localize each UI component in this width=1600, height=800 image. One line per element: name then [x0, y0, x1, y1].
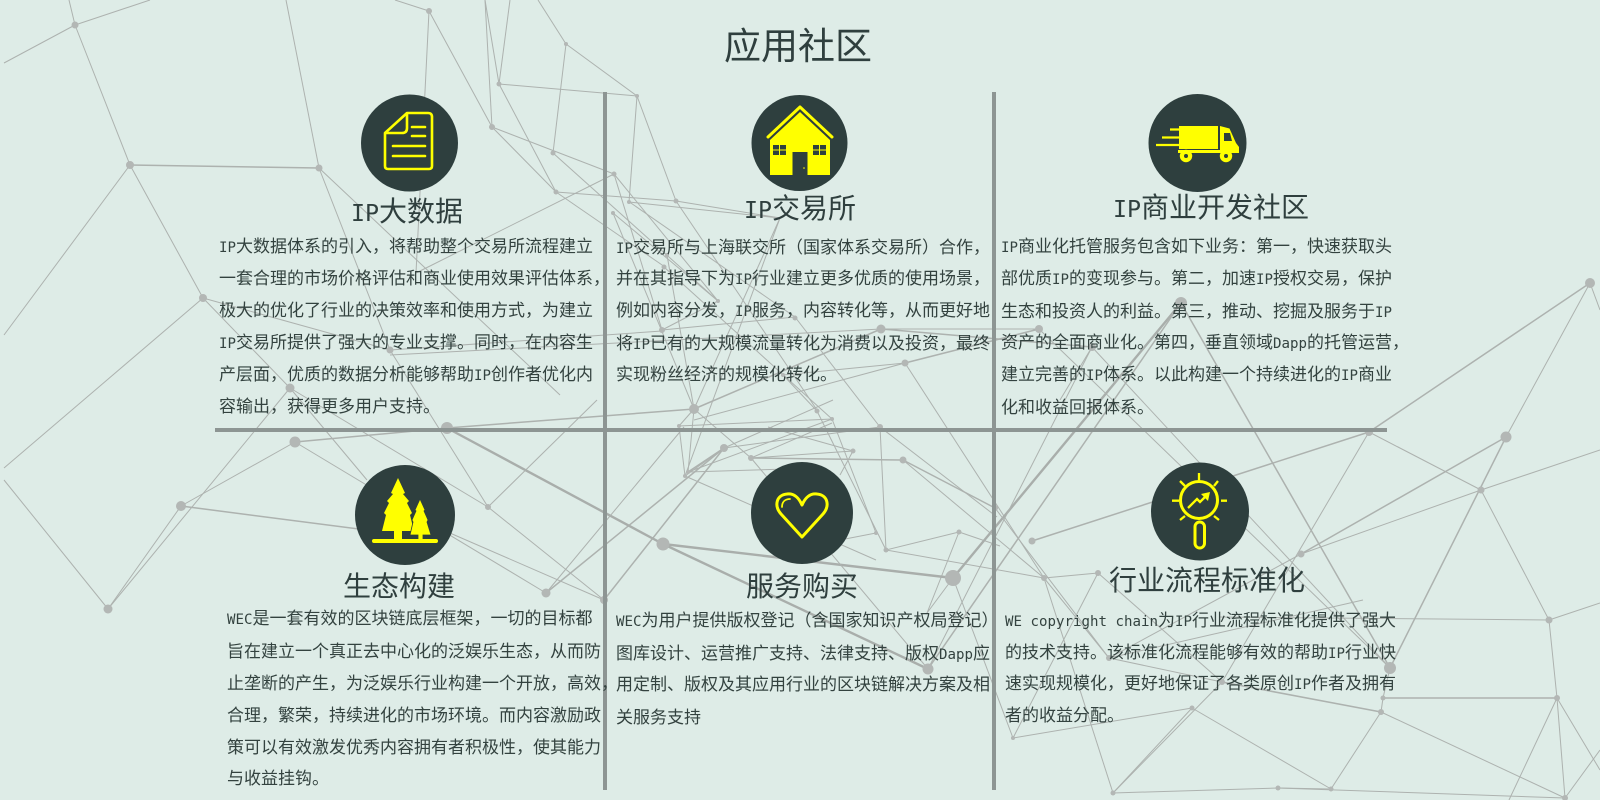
text block: 旨在建立一个真正去中心化的泛娱乐生态，从而防 — [227, 637, 601, 662]
text block: 与收益挂钩。 — [227, 764, 329, 789]
text block: 容输出，获得更多用户支持。 — [219, 392, 440, 417]
grid dividers — [215, 92, 1387, 790]
heading: IP交易所 — [744, 187, 856, 227]
text block: 速实现规模化，更好地保证了各类原创IP作者及拥有 — [1005, 669, 1396, 694]
panel: IP exchange — [616, 95, 990, 385]
text block: 极大的优化了行业的决策效率和使用方式，为建立 — [219, 296, 593, 321]
text block: 实现粉丝经济的规模化转化。 — [616, 360, 837, 385]
text block: 建立完善的IP体系。以此构建一个持续进化的IP商业 — [1001, 360, 1392, 385]
panel: industry process standardisation — [1005, 462, 1396, 726]
text block: 关服务支持 — [616, 703, 701, 728]
text block: 将IP已有的大规模流量转化为消费以及投资，最终 — [616, 329, 990, 354]
text block: 用定制、版权及其应用行业的区块链解决方案及相 — [616, 670, 990, 695]
icon: magnifier with rising chart — [1151, 462, 1249, 560]
heading: 服务购买 — [746, 565, 858, 605]
panel: service purchase — [616, 462, 998, 728]
title: 应用社区 — [724, 16, 872, 70]
text block: WEC为用户提供版权登记（含国家知识产权局登记） — [616, 606, 998, 631]
text block: IP商业化托管服务包含如下业务：第一，快速获取头 — [1001, 232, 1392, 257]
text block: 化和收益回报体系。 — [1001, 393, 1154, 418]
icon: house — [752, 95, 848, 191]
heading: IP商业开发社区 — [1113, 186, 1309, 226]
text block: 产层面，优质的数据分析能够帮助IP创作者优化内 — [219, 360, 593, 385]
text block: 例如内容分发，IP服务，内容转化等，从而更好地 — [616, 296, 990, 321]
text block: 策可以有效激发优秀内容拥有者积极性，使其能力 — [227, 733, 601, 758]
text block: 图库设计、运营推广支持、法律支持、版权Dapp应 — [616, 639, 990, 664]
heading: 生态构建 — [343, 565, 455, 605]
heading: 行业流程标准化 — [1109, 559, 1305, 599]
text block: 生态和投资人的利益。第三，推动、挖掘及服务于IP — [1001, 297, 1392, 322]
text block — [616, 233, 990, 385]
icon: document — [361, 94, 458, 192]
text block — [1005, 606, 1396, 726]
text block: IP交易所提供了强大的专业支撑。同时，在内容生 — [219, 328, 593, 353]
text block: 止垄断的产生，为泛娱乐行业构建一个开放，高效， — [227, 669, 618, 694]
text block: 资产的全面商业化。第四，垂直领域Dapp的托管运营， — [1001, 328, 1409, 353]
panel: IP big data — [219, 94, 610, 417]
text block: 合理，繁荣，持续进化的市场环境。而内容激励政 — [227, 701, 601, 726]
text block: WE copyright chain为IP行业流程标准化提供了强大 — [1005, 606, 1396, 631]
icon: heart — [751, 462, 853, 564]
text block: 部优质IP的变现参与。第二，加速IP授权交易，保护 — [1001, 264, 1392, 289]
icon: delivery truck — [1148, 94, 1246, 192]
text block: IP交易所与上海联交所（国家体系交易所）合作， — [616, 233, 990, 258]
panel: ecosystem building — [227, 465, 618, 789]
text block — [219, 232, 610, 417]
text block: 者的收益分配。 — [1005, 701, 1124, 726]
text block: WEC是一套有效的区块链底层框架，一切的目标都 — [227, 604, 592, 629]
text block: 并在其指导下为IP行业建立更多优质的使用场景， — [616, 264, 990, 289]
text block — [1001, 232, 1409, 418]
text block: 一套合理的市场价格评估和商业使用效果评估体系， — [219, 264, 610, 289]
icon: trees — [355, 465, 455, 565]
text block — [227, 604, 618, 789]
text block: 的技术支持。该标准化流程能够有效的帮助IP行业快 — [1005, 638, 1396, 663]
text block — [616, 606, 998, 728]
text block: IP大数据体系的引入，将帮助整个交易所流程建立 — [219, 232, 593, 257]
heading: IP大数据 — [351, 190, 463, 230]
panel: IP commercial development community — [1001, 94, 1409, 418]
